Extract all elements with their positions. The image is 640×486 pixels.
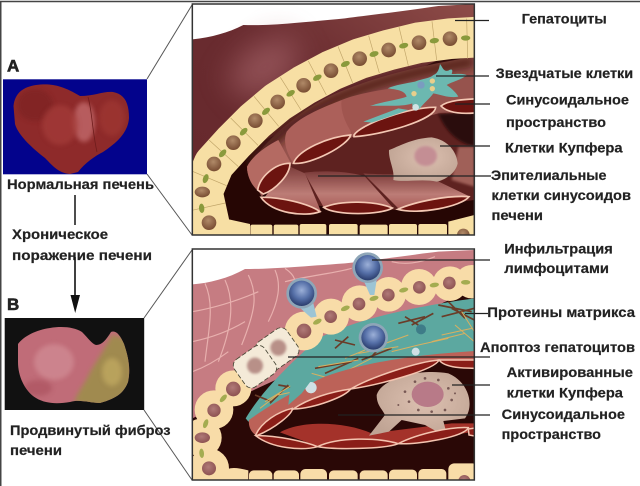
- label: hepatocyte apoptosis: Апоптоз гепатоцитов: [480, 340, 635, 355]
- bile canaliculi: [199, 35, 470, 213]
- stellate cell: [363, 64, 467, 123]
- bottom hepatocyte row: [228, 215, 474, 234]
- leader lines: normal panel: [318, 20, 491, 176]
- caption: advanced fibrosis: Продвинутый фиброз: [10, 423, 171, 438]
- cell dividers: [186, 19, 468, 212]
- label: sinusoidal space: пространство: [506, 115, 606, 130]
- small teal vesicles: [288, 324, 426, 405]
- text: chronic liver damage: поражение печени: [12, 248, 152, 263]
- lower right wall: [452, 147, 474, 187]
- panel: normal sinusoid cross-section: [192, 3, 476, 236]
- red wall: [249, 351, 474, 436]
- arrow line: upper stem: [74, 195, 76, 225]
- outer liver tissue: [193, 4, 474, 162]
- caption: normal liver: Нормальная печень: [7, 177, 154, 192]
- shadow below hepatocytes: [248, 57, 474, 170]
- label: sinusoid epithelial cells: клетки синусоидов: [492, 188, 631, 203]
- label: sinusoidal space, fibrosis: Синусоидальное: [502, 407, 626, 422]
- photo: fibrotic liver: [5, 318, 144, 410]
- caption: advanced fibrosis: печени: [10, 443, 62, 458]
- label: lymphocyte infiltration: [504, 241, 613, 276]
- label: matrix proteins: Протеины матрикса: [487, 305, 636, 320]
- label: Kupffer cells: Клетки Купфера: [505, 140, 623, 156]
- panel: fibrotic sinusoid cross-section: [183, 249, 488, 486]
- outer tissue: [193, 250, 474, 418]
- label: lymphocyte infiltration: Инфильтрация: [504, 241, 613, 256]
- bile canaliculi: [199, 280, 470, 458]
- photo: normal liver: [3, 79, 147, 174]
- label: sinusoidal space: [506, 92, 630, 130]
- apoptotic hepatocytes: [232, 327, 300, 388]
- leader lines: fibrotic panel: [288, 260, 490, 415]
- label: sinusoid epithelial cells: Эпителиальные: [491, 168, 607, 183]
- hepatocyte nuclei: [195, 31, 457, 230]
- label: stellate cells: Звездчатые клетки: [496, 66, 633, 81]
- central space: [265, 113, 474, 210]
- label: sinusoidal space, fibrosis: пространство: [502, 427, 601, 442]
- upper endothelial wall: [247, 57, 474, 197]
- fibrous matrix: [255, 302, 474, 403]
- bottom hepatocyte row: [226, 463, 474, 480]
- Kupffer cell: [389, 137, 458, 182]
- label: activated Kupffer cells: Активированные: [507, 365, 634, 380]
- label: activated Kupffer cells: [507, 365, 634, 401]
- collagen fibres: [260, 312, 474, 408]
- label: lymphocyte infiltration: лимфоцитами: [504, 261, 609, 276]
- lymphocytes: [286, 252, 388, 352]
- label: sinusoidal space: Синусоидальное: [506, 92, 630, 108]
- label: hepatocytes: Гепатоциты: [522, 12, 607, 26]
- tissue cell lines: [192, 257, 435, 372]
- label: sinusoidal space, fibrosis: [502, 407, 626, 442]
- sinusoid endothelial cells: [258, 99, 478, 214]
- label: A: A: [7, 56, 19, 76]
- label: sinusoid epithelial cells: [491, 168, 631, 223]
- tissue highlight: [223, 22, 307, 104]
- hepatocytes: [193, 265, 474, 480]
- activated Kupffer cell: [369, 372, 470, 438]
- sinusoid lumen: [192, 288, 474, 480]
- text: chronic liver damage: [12, 227, 152, 263]
- caption: advanced fibrosis: [10, 423, 171, 458]
- text: chronic liver damage: Хроническое: [12, 227, 109, 242]
- hepatocyte band: [202, 37, 485, 253]
- dark recess on the right: [438, 112, 474, 147]
- label: sinusoid epithelial cells: печени: [492, 208, 543, 223]
- lumen floor: [280, 423, 474, 446]
- hepatocyte nuclei: [195, 277, 456, 475]
- label: B: B: [7, 295, 19, 314]
- sinusoid endothelial cells: [256, 360, 478, 449]
- label: activated Kupffer cells: клетки Купфера: [507, 386, 624, 401]
- sinusoid lumen: [224, 58, 474, 234]
- connector lines from photos to panels: [144, 5, 192, 480]
- apoptotic nuclei: [247, 340, 286, 374]
- teal activated stellate band: [246, 298, 474, 422]
- endothelial tube folds: [247, 87, 470, 212]
- arrow: progression to fibrosis: [70, 257, 80, 313]
